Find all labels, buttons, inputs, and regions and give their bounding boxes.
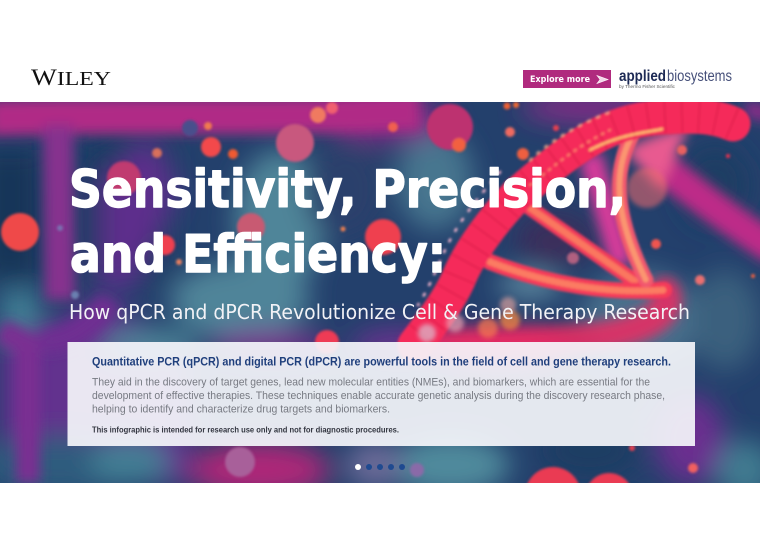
- main title: and Efficiency:: [70, 225, 446, 285]
- explore more button: [523, 70, 611, 88]
- subtitle: How qPCR and dPCR Revolutionize Cell & Gene Therapy Research: [69, 300, 690, 324]
- applied biosystems logo: biosystems: [667, 68, 732, 85]
- applied biosystems logo: [619, 68, 732, 89]
- bokeh particles: [1, 102, 755, 523]
- icon: paper arrow: [597, 76, 608, 84]
- helix main strand: [415, 116, 733, 345]
- intro panel: [68, 342, 695, 446]
- main title: [69, 160, 626, 285]
- applied biosystems logo: by Thermo Fisher Scientific: [619, 84, 676, 89]
- panel body text: They aid in the discovery of target genes, lead new molecular entities (NMEs), and biomarkers, which are essential for the: [92, 376, 650, 388]
- helix rungs: [530, 208, 636, 282]
- applied biosystems logo: applied: [619, 68, 666, 85]
- panel heading: Quantitative PCR (qPCR) and digital PCR (dPCR) are powerful tools in the field of cell and gene therapy research.: [92, 354, 671, 368]
- explore more button: Explore more: [530, 75, 590, 85]
- panel body text: [92, 376, 665, 416]
- helix lower strand glow: [420, 292, 667, 346]
- Wiley logo: WILEY: [31, 65, 111, 90]
- hero background image: [0, 102, 760, 483]
- main title: Sensitivity, Precision,: [69, 160, 626, 220]
- research use disclaimer: This infographic is intended for research use only and not for diagnostic procedures.: [92, 426, 399, 434]
- carousel dots: [355, 464, 405, 470]
- panel body text: helping to identify and characterize drug targets and biomarkers.: [92, 404, 390, 416]
- panel body text: development of effective therapies. These techniques enable accurate genetic analysis during the discovery research phase,: [92, 390, 665, 402]
